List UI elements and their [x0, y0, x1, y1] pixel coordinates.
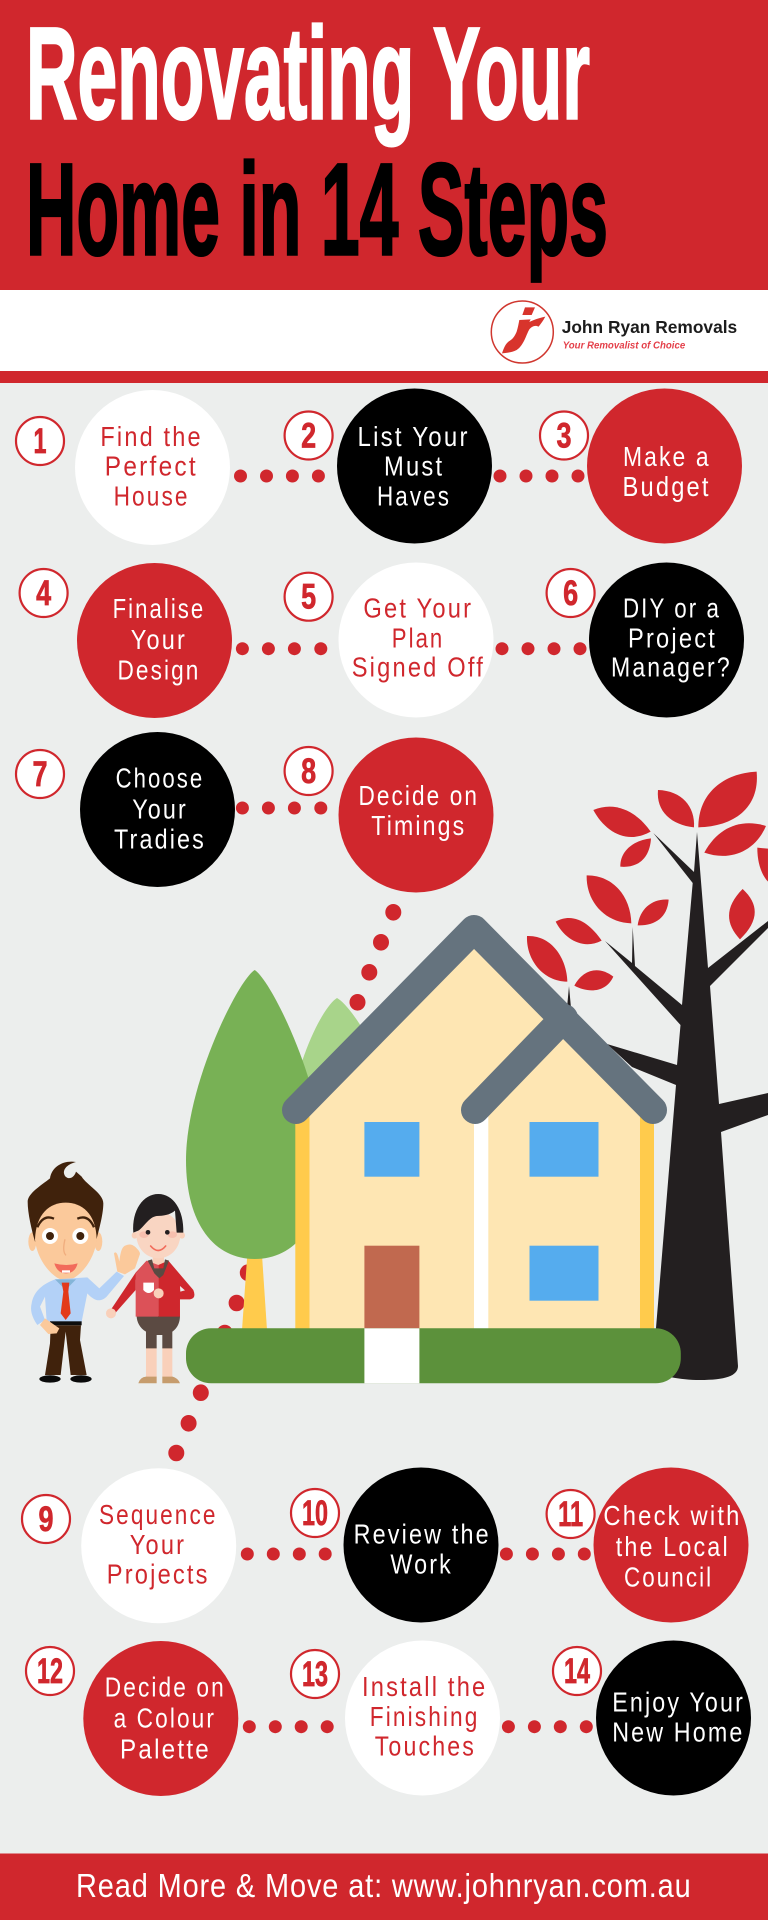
step 2 circle: Must: [384, 451, 444, 482]
house: [186, 929, 681, 1383]
step 7 circle: Your: [132, 793, 188, 824]
dots: steps 13 to 14: [502, 1720, 593, 1733]
step 7 badge: [16, 750, 64, 798]
step 10 circle: Work: [390, 1548, 453, 1579]
step 4 circle: Your: [131, 624, 187, 655]
step 6 badge: [547, 569, 595, 617]
step 11 badge: [547, 1490, 595, 1538]
step 4 circle: Finalise: [113, 593, 205, 624]
step 5 circle: Signed Off: [352, 652, 485, 683]
child: [106, 1194, 194, 1383]
step 5 circle: [338, 562, 494, 718]
people: man and child waving: [28, 1162, 194, 1383]
step 13 circle: Touches: [375, 1730, 476, 1761]
step 2 circle: List Your: [358, 421, 470, 452]
step 13 badge: 13: [302, 1655, 328, 1694]
step 10 circle: Review the: [354, 1518, 491, 1549]
dotted path from step 8 down to step 9: [168, 904, 401, 1461]
step 13 badge: [291, 1650, 339, 1698]
step 2 circle: [337, 388, 492, 544]
step 4 badge: [20, 569, 68, 617]
step 11 circle: Council: [624, 1562, 713, 1593]
step 5 badge: [285, 573, 333, 621]
step 2 circle: Haves: [377, 480, 451, 511]
step 10 badge: [291, 1489, 339, 1537]
step 3 circle: Make a: [623, 441, 711, 472]
step 9 circle: [81, 1468, 236, 1623]
step 6 circle: Project: [628, 623, 717, 654]
dots: steps 10 to 11: [500, 1548, 591, 1560]
step 14 badge: [553, 1647, 601, 1695]
dots: steps 1 to 2: [234, 470, 325, 482]
step 13 circle: Install the: [362, 1671, 487, 1702]
step 12 circle: Palette: [120, 1733, 211, 1764]
dots: steps 7 to 8: [236, 802, 327, 814]
step 4 badge: 4: [36, 574, 52, 613]
step 6 circle: Manager?: [611, 652, 732, 683]
step 10 circle: [344, 1468, 498, 1622]
bare tree with red leaves: [527, 772, 768, 1380]
door: [364, 1246, 419, 1329]
logo: John Ryan Removals: John Ryan Removals: [562, 317, 737, 337]
small light-green tree: [290, 998, 400, 1110]
dots: steps 5 to 6: [496, 642, 586, 655]
footer band: [0, 1854, 768, 1920]
dots: steps 4 to 5: [236, 642, 327, 655]
step 1 circle: House: [114, 480, 190, 511]
garden hedge and path: [186, 1328, 681, 1383]
step 9 badge: 9: [38, 1500, 54, 1539]
step 8 circle: [338, 738, 494, 892]
step 14 circle: New Home: [612, 1716, 744, 1747]
step 11 circle: [594, 1468, 748, 1622]
step 12 circle: Decide on: [105, 1672, 226, 1703]
step 1 circle: [75, 390, 230, 545]
step 12 badge: [26, 1647, 74, 1695]
step 1 badge: [16, 417, 64, 465]
step 2 badge: [285, 412, 333, 460]
step 14 circle: Enjoy Your: [612, 1687, 745, 1718]
step 3 circle: Budget: [622, 471, 711, 502]
step 1 badge: 1: [34, 422, 46, 461]
step 12 badge: 12: [37, 1652, 63, 1691]
step 8 circle: Timings: [371, 810, 466, 841]
logo band: [0, 290, 768, 383]
step 5 circle: Plan: [392, 623, 444, 654]
step 13 circle: Finishing: [370, 1701, 480, 1732]
step 6 badge: 6: [563, 574, 578, 613]
logo: John Ryan Removals: [491, 301, 737, 363]
large green tree: [186, 970, 323, 1330]
step 12 circle: a Colour: [114, 1703, 216, 1734]
step 8 badge: 8: [301, 752, 316, 791]
step 3 badge: 3: [556, 416, 572, 456]
roof: [296, 929, 653, 1110]
footer text: Read More & Move at: www.johnryan.com.au: [76, 1867, 692, 1904]
step 11 badge: 11: [558, 1495, 583, 1534]
step 11 circle: Check with: [603, 1500, 742, 1531]
step 2 badge: 2: [301, 416, 316, 456]
step 14 circle: [596, 1640, 751, 1796]
step 5 circle: Get Your: [363, 592, 473, 623]
step 9 circle: Sequence: [99, 1499, 218, 1530]
step 5 badge: 5: [301, 578, 316, 617]
dots: steps 12 to 13: [243, 1720, 334, 1733]
step 7 circle: Tradies: [114, 824, 206, 855]
man: [28, 1162, 140, 1383]
step 8 circle: Decide on: [358, 780, 479, 811]
step 12 circle: [83, 1641, 238, 1796]
windows: [364, 1122, 598, 1301]
step 3 badge: [540, 412, 588, 460]
step 13 circle: [345, 1640, 500, 1796]
dots: steps 2 to 3: [494, 470, 584, 482]
header band: [0, 0, 768, 290]
step 11 circle: the Local: [616, 1531, 730, 1562]
step 9 circle: Projects: [107, 1558, 210, 1589]
logo: John Ryan Removals: Your Removalist of Choice: [563, 340, 685, 352]
step 6 circle: [589, 562, 744, 718]
step 6 circle: DIY or a: [623, 592, 721, 623]
step 7 circle: Choose: [116, 762, 204, 793]
step 8 badge: [285, 747, 333, 795]
step 1 circle: Perfect: [105, 451, 198, 482]
step 9 badge: [22, 1495, 70, 1543]
step 7 badge: 7: [32, 755, 48, 794]
step 14 badge: 14: [564, 1652, 590, 1691]
red leaves: [527, 772, 768, 990]
dots: steps 9 to 10: [241, 1548, 332, 1560]
step 4 circle: [77, 563, 232, 718]
step 10 badge: 10: [302, 1494, 328, 1533]
step 4 circle: Design: [118, 654, 200, 686]
step 9 circle: Your: [130, 1529, 186, 1560]
step 3 circle: [587, 388, 742, 544]
step 1 circle: Find the: [100, 421, 203, 452]
step 7 circle: [80, 732, 235, 887]
